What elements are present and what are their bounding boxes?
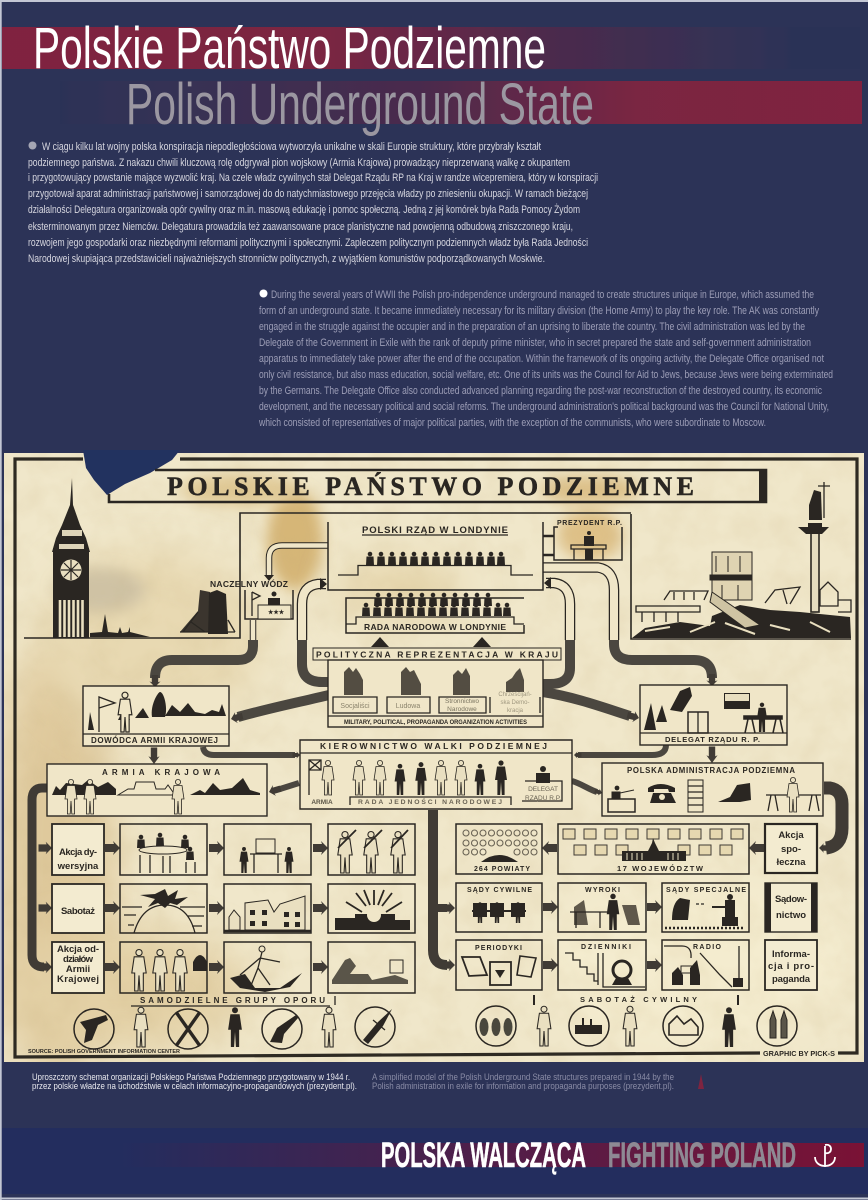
- illustration: London with Big Ben and Tower Bridge: [24, 478, 631, 638]
- panel: political parties and activities: ska Demo-: [500, 700, 530, 706]
- icon: grenades: [476, 1006, 516, 1046]
- cell: judiciary heading: Sądow-: [775, 894, 807, 905]
- text block: Polish introduction: podziemnego państwa. Z nakazu chwili kluczową rolę odgrywał pion wojskowy (Armia Krajowa) prowadzący nieprzerwaną walkę z okupantem: [28, 157, 570, 169]
- slogan: Polish: POLSKA WALCZĄCA: [381, 1136, 586, 1175]
- arrows: leadership to army and administration: [267, 781, 603, 797]
- paper sheet: [4, 453, 864, 1062]
- caption: English: A simplified model of the Polish Underground State structures prepared in 1944 by the: [372, 1072, 674, 1083]
- credit: graphic: GRAPHIC BY PICK-S: [763, 1051, 835, 1058]
- torn corner: [83, 450, 180, 495]
- panel: home army: [47, 764, 267, 816]
- grid: home army activities: [52, 824, 415, 993]
- pipe: commander in chief to home army command: [149, 620, 253, 687]
- caption: Polish: [32, 1072, 357, 1092]
- cell: judiciary heading: nictwo: [776, 910, 806, 921]
- icon: crossed rifles: [168, 1009, 208, 1049]
- cell: sabotage heading: Sabotaż: [61, 906, 95, 917]
- text block: Polish introduction: [28, 141, 598, 265]
- panel: commander in chief: [210, 578, 293, 619]
- panel: government delegate: [640, 685, 787, 745]
- caption: English: [372, 1072, 674, 1092]
- panel: leadership of underground struggle: RADA JEDNOŚCI NARODOWEJ: [358, 797, 502, 806]
- section: civil sabotage: SABOTAŻ CYWILNY: [580, 995, 697, 1004]
- panel: political parties and activities: [328, 660, 543, 727]
- red band: footer: [120, 1143, 864, 1167]
- icon: factory: [569, 1006, 609, 1046]
- cell: sabotage heading: [52, 884, 104, 933]
- cell: social action heading: spo-: [781, 844, 801, 855]
- panel: home army commander: DOWÓDCA ARMII KRAJOWEJ: [91, 736, 218, 745]
- footer banner: [2, 1128, 868, 1194]
- cell: factory explosion: [328, 884, 415, 933]
- icon: submachine gun: [262, 1009, 302, 1049]
- cell: partisan units heading: [52, 942, 104, 993]
- label: political representation in the country: [313, 637, 561, 660]
- section: independent resistance groups: [74, 996, 395, 1049]
- panel: commander in chief: NACZELNY WÓDZ: [210, 578, 288, 589]
- cell: partisan units heading: Armii: [66, 964, 90, 975]
- heading: Polish: Polskie Państwo Podziemne: [33, 16, 546, 81]
- panel: leadership of underground struggle: KIEROWNICTWO WALKI PODZIEMNEJ: [320, 741, 547, 751]
- panel: political parties and activities: kracja: [507, 708, 524, 714]
- caption: Polish: Uproszczony schemat organizacji Polskiego Państwa Podziemnego przygotowany w 1944 r.: [32, 1072, 350, 1083]
- panel: leadership of underground struggle: RZĄDU R.P.: [525, 795, 561, 802]
- heading: English: Polish Underground State: [126, 72, 594, 137]
- panel: home army commander: [83, 686, 229, 746]
- pipe: government to commander in chief: [264, 546, 328, 581]
- cell: prone fighter and supplies: [328, 942, 415, 993]
- section: civil sabotage: [476, 995, 797, 1047]
- cell: judiciary heading: [765, 883, 817, 932]
- caption: English: Polish administration in exile for information and propaganda purposes (prezydent.pl).: [372, 1081, 674, 1092]
- connectors: pipes and arrows: [32, 546, 842, 974]
- cell: partisan units heading: działów: [63, 954, 94, 965]
- panel: commander in chief: ★★★: [268, 609, 285, 616]
- panel: political parties and activities: MILITARY, POLITICAL, PROPAGANDA ORGANIZATION ACTIVITIES: [344, 719, 527, 726]
- cell: radio: [662, 940, 749, 990]
- panel: National Council in London: [346, 593, 524, 633]
- panel: Polish government in London: POLSKI RZĄD W LONDYNIE: [362, 525, 508, 536]
- cell: civil courts: SĄDY CYWILNE: [467, 887, 532, 894]
- cell: daily papers: [558, 940, 646, 990]
- cell: three soldiers and a hut: [120, 942, 207, 993]
- text block: Polish introduction: przygotował aparat administracji państwowej i samorządowej do do natychmiastowego przejęcia władzy po zniesieniu okupacji. W ramach bieżącej: [28, 188, 588, 200]
- label: political representation in the country: POLITYCZNA REPREZENTACJA W KRAJU: [316, 650, 558, 660]
- panel: underground administration: [602, 763, 823, 816]
- cell: ruined town: [224, 884, 311, 933]
- icon: small red marker: [698, 1074, 704, 1089]
- bracket: administration branches: [819, 788, 842, 853]
- section: independent resistance groups: SAMODZIELNE GRUPY OPORU: [140, 996, 325, 1005]
- cell: man attacking: [224, 942, 311, 993]
- panel: leadership of underground struggle: DELEGAT: [528, 786, 558, 793]
- icon: pistol: [74, 1009, 114, 1049]
- civil saboteurs: [537, 1006, 637, 1046]
- icon: dagger: [355, 1007, 395, 1047]
- text block: Polish introduction: rozwojem jego gospodarki oraz niezbędnymi reformami politycznymi i społecznymi. Zapleczem politycznym podziemnych władz była Rada Jedności: [28, 237, 588, 249]
- panel: home army: ARMIA KRAJOWA: [102, 768, 220, 777]
- panel: president of the republic: PREZYDENT R.P.: [557, 520, 622, 527]
- text block: Polish introduction: działalności Delegatura organizowała opór cywilny oraz m.in. masową edukację i pomoc społeczną. Jedną z jej komórek była Rada Pomocy Żydom: [28, 203, 580, 216]
- poster title: POLSKIE PAŃSTWO PODZIEMNE: [167, 472, 694, 501]
- text block: Polish introduction: W ciągu kilku lat wojny polska konspiracja niepodległościowa wytworzyła unikalne w skali Europie struktury, które przybrały kształt: [42, 141, 542, 153]
- panel: leadership of underground struggle: ARMIA: [311, 799, 333, 806]
- outer frame: [15, 459, 857, 1057]
- cell: information and propaganda heading: cja i pro-: [768, 961, 814, 972]
- arrows: between administration grid cells: [542, 841, 764, 972]
- cell: 264 districts: [456, 824, 542, 874]
- cell: partisan units heading: Akcja od-: [57, 944, 99, 955]
- icon: houses: [663, 1006, 703, 1046]
- pipe: president to delegate: [543, 568, 718, 686]
- resistance member: woman: [228, 1007, 242, 1047]
- cell: information and propaganda heading: paganda: [772, 974, 811, 985]
- archival poster: organisation chart of the Polish Underground State: [0, 450, 864, 1080]
- cell: two men planning at a board: [224, 824, 311, 875]
- bracket: home army branches: [32, 788, 52, 973]
- panel: political parties and activities: Stronnictwo: [445, 698, 479, 705]
- credit: source: SOURCE: POLISH GOVERNMENT INFORMATION CENTER: [28, 1049, 180, 1055]
- cell: radio: RADIO: [693, 944, 722, 951]
- text block: English introduction: [258, 289, 833, 429]
- pipe: political representation right branch: [543, 577, 570, 684]
- pipe: country representation to delegate: [543, 692, 640, 723]
- arrows: vertical links to home army and administration: [148, 746, 718, 764]
- cell: verdicts: [558, 883, 646, 932]
- paper stains: [0, 453, 864, 1080]
- cell: conspirators around a table: [120, 824, 207, 875]
- cell: bridge explosion: [120, 884, 207, 933]
- panel: underground administration: POLSKA ADMINISTRACJA PODZIEMNA: [627, 766, 795, 775]
- cell: 17 voivodeships: [558, 824, 749, 874]
- title block: [2, 16, 862, 137]
- cell: periodicals: PERIODYKI: [475, 945, 522, 952]
- trunk: leadership to civil branches: [433, 810, 455, 971]
- panel: leadership of underground struggle: [300, 740, 572, 809]
- caption: Polish: przez polskie władze na uchodźstwie w celach informacyjno-propagandowych (prezydent.pl).: [32, 1081, 357, 1092]
- red band: English title: [60, 81, 862, 124]
- cell: periodicals: [456, 940, 542, 990]
- cell: information and propaganda heading: [765, 940, 817, 990]
- pipe: country representation to commander: [230, 695, 329, 724]
- pipe: political representation left branch: [302, 578, 329, 682]
- cell: special courts: SĄDY SPECJALNE: [666, 887, 746, 894]
- cell: partisan units heading: Krajowej: [57, 974, 99, 985]
- cell: verdicts: WYROKI: [585, 887, 620, 894]
- panel: government delegate: DELEGAT RZĄDU R. P.: [665, 735, 760, 744]
- text block: Polish introduction: i przygotowujący powstanie mające wyzwolić kraj. Na czele władz cywilnych stał Delegat Rządu RP na Kraj w randze wicepremiera, który w konspiracji: [28, 172, 598, 184]
- civil saboteur: woman: [722, 1007, 736, 1047]
- illustration: ruined Warsaw with Sigismund's Column: [631, 482, 851, 639]
- cell: daily papers: DZIENNIKI: [581, 944, 631, 951]
- panel: president of the republic: [543, 520, 622, 560]
- cell: 17 voivodeships: 17 WOJEWÓDZTW: [617, 864, 704, 873]
- red band: Polish title: [2, 27, 860, 69]
- icon: Fighting Poland anchor: [815, 1145, 835, 1167]
- pipe: links into underground leadership: [203, 745, 666, 758]
- cell: sabotage action heading: [52, 824, 104, 875]
- cell: 264 districts: 264 POWIATY: [474, 866, 530, 873]
- panel: political parties and activities: Socjaliści: [340, 703, 370, 710]
- cell: three armed men: [328, 824, 415, 875]
- text block: Polish introduction: eksterminowanym przez Niemców. Delegatura prowadziła też zaawansowane prace planistyczne nad powojenną odbudową zniszczonego kraju,: [28, 221, 573, 233]
- text block: Polish introduction: Narodowej skupiająca przedstawicieli najważniejszych stronnictw politycznych, z wyjątkiem komunistów podporządkowanych Moskwie.: [28, 253, 545, 265]
- cell: civil courts: [456, 883, 542, 932]
- arrows: between army grid cells: [105, 841, 328, 974]
- cell: information and propaganda heading: Informa-: [772, 949, 810, 960]
- cell: social action heading: [765, 824, 817, 873]
- cell: special courts: [662, 883, 749, 932]
- panel: political parties and activities: Narodowe: [447, 706, 477, 713]
- panel: political parties and activities: Chrześcijań-: [498, 692, 532, 698]
- icon: bullets: [757, 1006, 797, 1046]
- cell: social action heading: łeczna: [776, 857, 806, 868]
- panel: National Council in London: RADA NARODOWA W LONDYNIE: [364, 622, 506, 632]
- cell: social action heading: Akcja: [778, 830, 804, 841]
- grid: civil administration activities: [456, 824, 817, 990]
- resistance members: [134, 1007, 336, 1047]
- cell: sabotage action heading: Akcja dy-: [59, 847, 97, 858]
- panel: Polish government in London: [328, 522, 543, 590]
- cell: sabotage action heading: wersyjna: [57, 861, 99, 872]
- panel: political parties and activities: Ludowa: [396, 703, 420, 710]
